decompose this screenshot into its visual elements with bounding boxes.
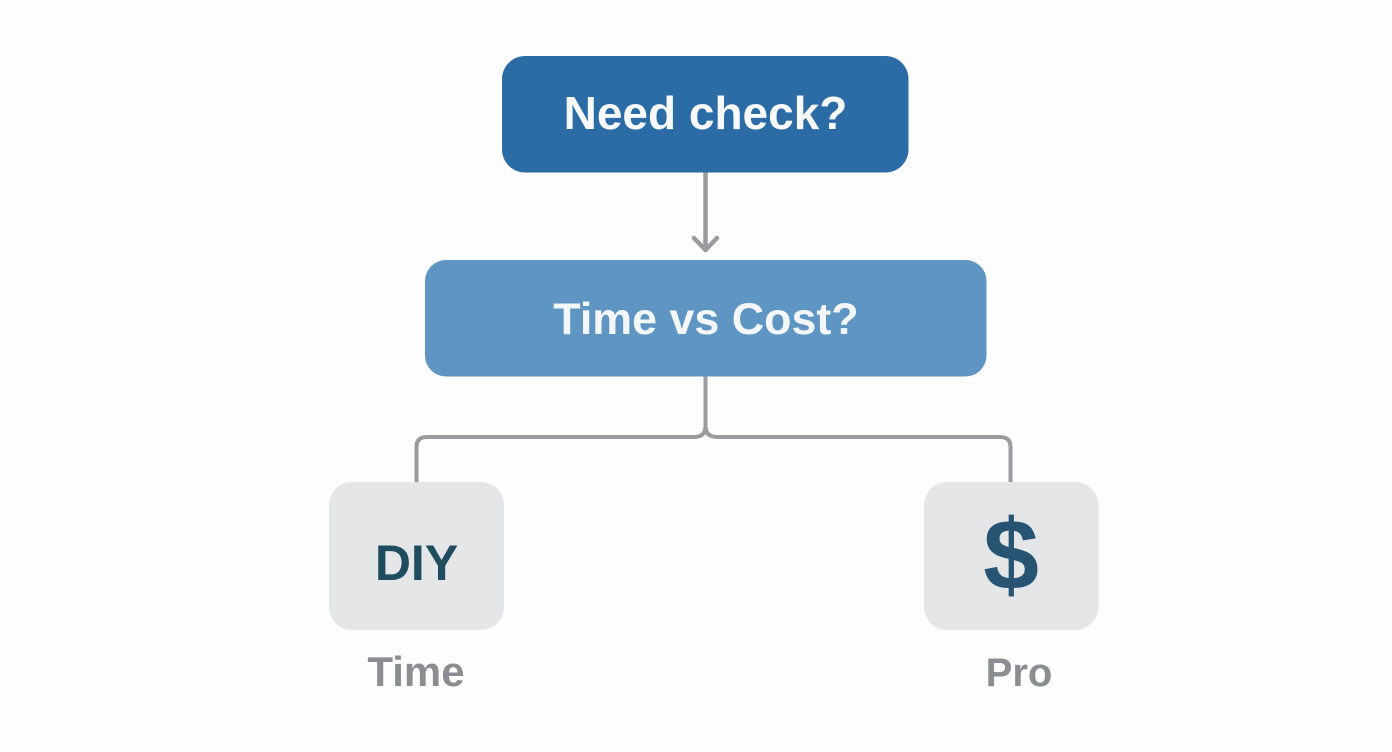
connector: time vs cost to DIY bbox=[416, 376, 706, 482]
heading: need check: Need check? bbox=[564, 87, 847, 139]
heading: time vs cost: Time vs Cost? bbox=[553, 294, 859, 344]
box: time vs cost bbox=[425, 260, 986, 376]
card: DIY bbox=[329, 482, 504, 630]
caption: Pro: Pro bbox=[986, 651, 1052, 695]
card: Pro bbox=[924, 482, 1098, 630]
arrow: need check to time vs cost bbox=[694, 172, 717, 250]
box: need check bbox=[502, 56, 908, 172]
connector: time vs cost to Pro bbox=[706, 376, 1010, 482]
caption: Time: Time bbox=[367, 648, 465, 695]
label: DIY: DIY bbox=[375, 535, 458, 591]
icon: dollar sign: $ bbox=[983, 499, 1039, 611]
